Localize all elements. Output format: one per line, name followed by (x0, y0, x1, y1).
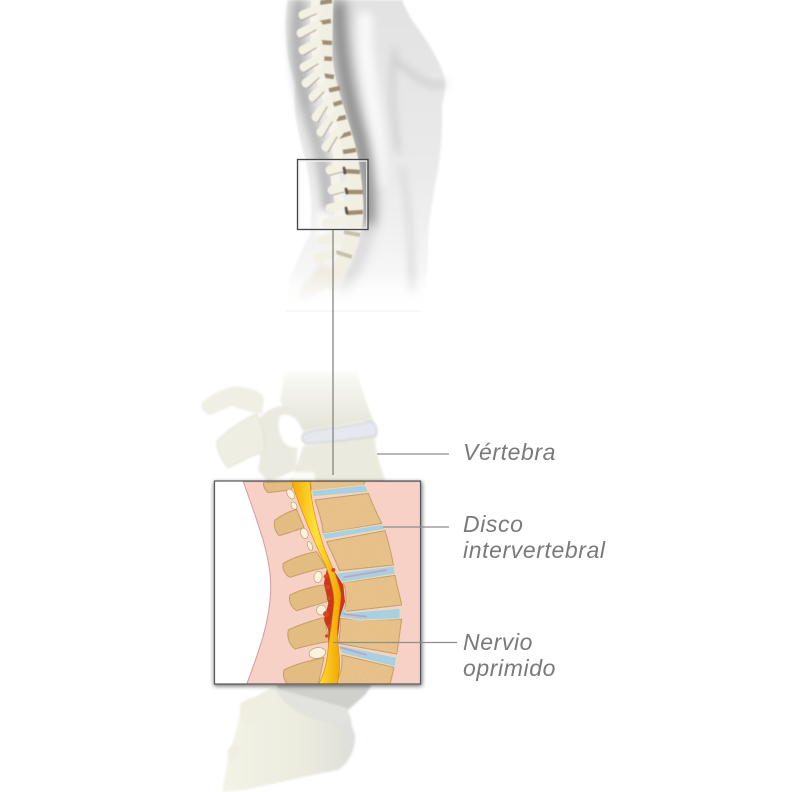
lower vertebral body (290, 437, 386, 482)
torso muscle shading (312, 20, 444, 290)
inset shadow (214, 482, 422, 686)
label text: Nervio (463, 629, 533, 655)
torso silhouette (285, 0, 445, 310)
lower spine shadow (340, 225, 368, 292)
spine (301, 0, 363, 283)
sacrum (298, 262, 345, 302)
inset background (214, 481, 420, 684)
upper transverse process (201, 387, 264, 415)
illustration: sacrum (222, 684, 372, 792)
process undersides (301, 14, 344, 195)
label text: oprimido (463, 655, 556, 681)
spinal cord (292, 482, 341, 684)
soft tissue (243, 482, 421, 684)
sacral highlight (275, 688, 352, 723)
vertebral bodies (325, 0, 356, 283)
inset border (214, 481, 420, 684)
vertebral bodies (310, 482, 402, 684)
sacral bumps (228, 696, 270, 762)
vertebral discs (318, 1, 363, 213)
back shadow (297, 0, 328, 210)
label text: intervertebral (463, 537, 606, 563)
spinous processes (301, 9, 346, 258)
connector line (332, 230, 334, 475)
inset artwork (243, 482, 421, 684)
illustration: enlarged vertebra (201, 372, 386, 482)
panel: spine cross-section inset (214, 481, 422, 686)
lower transverse process (217, 414, 265, 468)
inflamed nerve area (323, 557, 345, 647)
illustration: torso with spine (270, 0, 445, 311)
foramen (279, 415, 302, 447)
sacrum body (222, 687, 355, 792)
canal highlight (291, 472, 316, 482)
label text: Vértebra (463, 439, 556, 465)
disc (302, 421, 377, 444)
spinous processes (263, 482, 329, 684)
leader line (383, 526, 449, 528)
label: Disco intervertebral (383, 511, 606, 563)
zoom box on spine (298, 160, 368, 230)
leader line (377, 453, 449, 455)
torso base line (286, 310, 421, 312)
intervertebral discs (312, 485, 400, 667)
lumbar body remnant (276, 684, 372, 710)
label text: Disco (463, 511, 524, 537)
label: Nervio oprimido (333, 629, 556, 681)
facet joints (285, 488, 328, 660)
articular column (314, 0, 340, 255)
inflammation spots (323, 568, 335, 638)
upper vertebral body (280, 372, 373, 431)
disc inflammation tint (340, 570, 387, 655)
bottom fade (270, 272, 440, 310)
leader line (333, 642, 457, 644)
spine shadow (339, 0, 368, 225)
foramen gaps (344, 168, 347, 213)
pedicle (258, 406, 300, 482)
